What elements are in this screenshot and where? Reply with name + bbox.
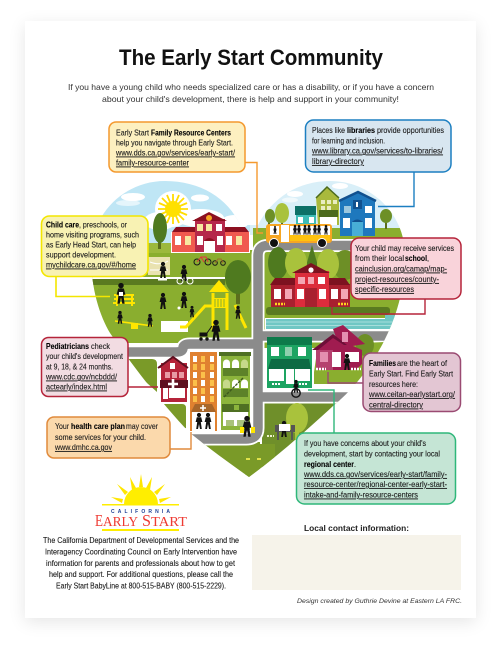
introduction text xyxy=(68,82,434,104)
callout: family resource centers: family-resource-center xyxy=(116,158,189,168)
callout: health care plan: may cover xyxy=(126,421,158,431)
callout: school xyxy=(351,238,461,299)
callout: regional center: resource-center/regional-center-early-start- xyxy=(304,479,447,489)
California Early Start logo: E xyxy=(95,511,103,530)
callout: family resource centers: Early Start xyxy=(116,128,150,138)
bicycles xyxy=(194,257,225,265)
about text: help and support. For additional questions, please call the xyxy=(49,569,233,579)
callout: family resource centers xyxy=(109,122,245,172)
California Early Start logo: S xyxy=(142,511,151,530)
park lower right tree and bench xyxy=(267,403,308,440)
callout: child care xyxy=(42,216,148,276)
callout: health care plan: www.dmhc.ca.gov xyxy=(54,442,113,452)
callout: school: from their local xyxy=(355,253,404,263)
roads xyxy=(125,246,395,439)
callout: libraries: www.library.ca.gov/services/to-libraries/ xyxy=(311,146,444,156)
connector lines xyxy=(56,162,425,449)
callout: regional center xyxy=(296,433,456,504)
callout: school: cainclusion.org/camap/map- xyxy=(355,264,447,274)
callout: school: , xyxy=(427,253,429,263)
California Early Start logo xyxy=(95,474,187,531)
callout: families: central-directory xyxy=(369,400,424,410)
callout: health care plan: health care plan xyxy=(71,421,125,431)
design credit: Design created by Guthrie Devine at Eastern LA FRC. xyxy=(297,598,462,605)
family house lawn xyxy=(314,342,385,384)
callout: libraries: library-directory xyxy=(312,156,365,166)
callout: family resource centers: help you navigate through Early Start. xyxy=(116,138,233,148)
right sky trees and houses xyxy=(265,187,392,229)
callout: health care plan: Your xyxy=(55,421,69,431)
local contact box xyxy=(252,535,461,590)
introduction text: about your child's development, there is help and support in your community! xyxy=(102,94,399,104)
introduction text: If you have a young child who needs specialized care or has a disability, or if you have a concern xyxy=(68,82,434,92)
callout: regional center: If you have concerns about your child's xyxy=(304,438,426,448)
seesaw xyxy=(115,321,153,329)
trees behind school xyxy=(268,245,357,280)
green apartment building xyxy=(219,351,251,431)
callout: regional center: . xyxy=(354,459,356,469)
tree by preschool xyxy=(153,213,167,249)
callout: child care: home visiting programs, such xyxy=(46,230,139,240)
green shop xyxy=(267,337,312,388)
park path xyxy=(92,277,225,285)
preschool building xyxy=(171,212,250,253)
playground structure xyxy=(161,280,246,332)
callout: school: project-resources/county- xyxy=(355,274,439,284)
callout: health care plan xyxy=(47,417,170,458)
callout: school: school xyxy=(405,253,427,263)
about text: Early Start BabyLine at 800-515-BABY (800-515-2229). xyxy=(56,580,226,590)
title: The Early Start Community xyxy=(119,45,384,70)
callout: pediatricians: www.cdc.gov/ncbddd/ xyxy=(45,372,118,382)
park sandbox xyxy=(148,257,170,275)
about text: information for parents and professionals about how to get xyxy=(46,558,236,568)
callout: libraries: Places like xyxy=(312,125,345,135)
about text xyxy=(43,535,239,590)
callout: pediatricians: Pediatricians xyxy=(46,341,89,351)
sun xyxy=(158,194,188,224)
callout: child care: as Early Head Start, can help xyxy=(46,240,136,250)
callout: families: are the heart of xyxy=(397,358,448,368)
people in park xyxy=(117,262,241,327)
shopper xyxy=(240,416,255,437)
callout: pediatricians: your child's development xyxy=(46,351,124,361)
callout: regional center: intake-and-family-resource-centers xyxy=(304,490,418,500)
callout: child care: support development. xyxy=(46,250,116,260)
heart community illustration xyxy=(85,175,410,480)
heart ground and sky xyxy=(85,175,410,480)
bench with reading adult xyxy=(113,283,135,306)
callout: pediatricians xyxy=(42,338,128,396)
callout: regional center: www.dds.ca.gov/services/early-start/family- xyxy=(303,469,447,479)
callout: health care plan: some services for your child. xyxy=(55,432,146,442)
local contact heading: Local contact information: xyxy=(304,524,409,533)
callout: pediatricians: check xyxy=(91,341,111,351)
person in wheelchair xyxy=(292,380,300,397)
callout: families xyxy=(363,353,460,412)
callout: regional center: development, start by contacting your local xyxy=(304,448,440,458)
person with stroller xyxy=(199,320,220,341)
callout: family resource centers: www.dds.ca.gov/services/early-start/ xyxy=(115,148,236,158)
school block lawn xyxy=(266,252,390,315)
library building xyxy=(339,192,376,236)
California Early Start logo: TART xyxy=(151,515,187,530)
red school building xyxy=(270,263,350,307)
callout: regional center: regional center xyxy=(304,459,355,469)
pediatric clinic xyxy=(158,357,188,402)
river xyxy=(265,315,400,330)
callout: child care: mychildcare.ca.gov/#/home xyxy=(46,260,136,270)
callout: families: www.ceitan-earlystart.org/ xyxy=(368,389,456,399)
California Early Start logo: ARLY xyxy=(103,515,138,530)
callout: school: Your child may receive services xyxy=(355,243,454,253)
callout: libraries: libraries xyxy=(347,125,375,135)
about text: Interagency Coordinating Council on Early Intervention have xyxy=(45,546,237,556)
family house xyxy=(312,325,374,370)
bus xyxy=(266,224,332,248)
callout: school: specific-resources xyxy=(355,284,414,294)
large park tree xyxy=(225,260,251,304)
callout: child care: Child care xyxy=(46,220,79,230)
callout: pediatricians: at 9, 18, & 24 months. xyxy=(46,362,113,372)
callout: families: resources here: xyxy=(369,379,418,389)
callout: libraries: provide opportunities xyxy=(377,125,444,135)
orange apartment building xyxy=(189,351,218,432)
about text: The California Department of Developmental Services and the xyxy=(43,535,239,545)
California Early Start logo: CALIFORNIA xyxy=(111,509,170,515)
callout: libraries: for learning and inclusion. xyxy=(312,136,385,146)
callout: family resource centers: Family Resource Centers xyxy=(151,128,231,138)
callout: pediatricians: actearly/index.html xyxy=(46,382,107,392)
callout: families: Families xyxy=(369,358,396,368)
callout: libraries xyxy=(306,120,451,172)
callout: child care: , preschools, or xyxy=(79,220,127,230)
callout: families: Early Start. Find Early Start xyxy=(369,368,454,378)
